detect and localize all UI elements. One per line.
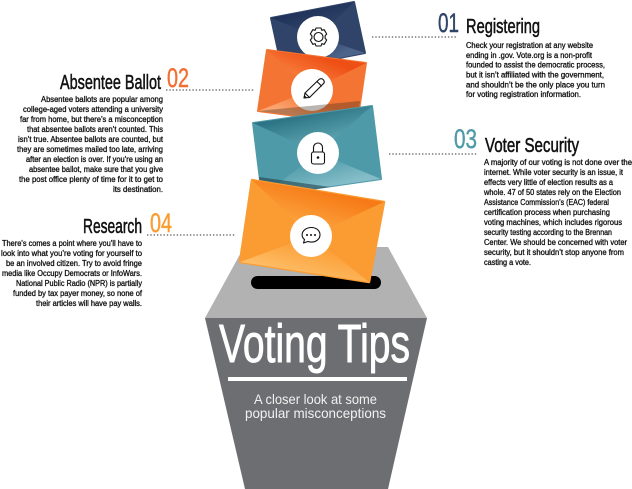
title underline	[228, 377, 407, 381]
dotted leader 03	[389, 153, 478, 155]
section 01: registering	[438, 8, 605, 99]
section 03: voter security	[454, 124, 632, 267]
body text: registering: ending in .gov. Vote.org is a non-profit	[466, 51, 593, 60]
dotted leader 01	[372, 36, 457, 38]
body text: research: their articles will have pay walls.	[36, 299, 142, 308]
body text: absentee ballot: after an election is over. If you’re using an	[26, 155, 163, 164]
body text: voter security: security testing according to the Brennan	[484, 228, 612, 237]
body text: absentee ballot: far from home, but there’s a misconception	[20, 115, 163, 124]
section 02: absentee ballot	[17, 63, 189, 194]
body text: registering: Check your registration at any website	[466, 41, 594, 50]
envelope 01: navy	[271, 2, 365, 69]
dotted leader 04	[147, 234, 236, 236]
heading: Research: Research	[83, 216, 142, 238]
body text: absentee ballot: its destination.	[113, 185, 163, 194]
number 01: 01	[438, 8, 459, 38]
body text: registering	[466, 41, 605, 99]
body text: absentee ballot: that absentee ballots aren’t counted. This	[27, 125, 163, 134]
body text: research	[1, 239, 143, 308]
heading: Registering: Registering	[466, 16, 540, 38]
envelope 04: amber	[240, 180, 384, 282]
shadow on orange envelope	[258, 101, 360, 124]
subtitle: A closer look at some	[254, 391, 377, 407]
heading: Voter Security: Voter Security	[485, 135, 579, 157]
body text: research: National Public Radio (NPR) is partially	[16, 279, 142, 288]
body text: research: be an involved citizen. Try to avoid fringe	[6, 259, 143, 268]
section 04: research	[1, 208, 172, 308]
body text: absentee ballot: college-aged voters attending a university	[23, 105, 163, 114]
body text: registering: for voting registration information.	[466, 90, 581, 99]
body text: voter security: internet. While voter security is an issue, it	[484, 168, 624, 177]
subtitle: popular misconceptions	[245, 405, 386, 421]
ballot slot	[251, 276, 381, 289]
heading: Absentee Ballot: Absentee Ballot	[60, 72, 161, 94]
ballot box	[205, 247, 427, 489]
dotted leader 02	[166, 89, 254, 91]
body text: registering: and shouldn’t be the only place you turn	[466, 80, 605, 90]
body text: registering: but it isn’t affiliated with the government,	[466, 70, 604, 80]
number 04: 04	[150, 208, 172, 238]
box lid	[205, 247, 427, 318]
body text: voter security: security, but it shouldn’t stop anyone from	[484, 248, 624, 257]
icon: pencil	[304, 79, 324, 98]
envelope 03: teal	[253, 106, 381, 196]
icon: speech bubble	[302, 228, 320, 243]
envelope 02: orange	[258, 50, 366, 124]
body text: research: media like Occupy Democrats or InfoWars.	[2, 269, 142, 278]
subtitle	[245, 391, 386, 421]
body text: absentee ballot: the post office plenty of time for it to get to	[19, 175, 164, 184]
body text: voter security	[483, 158, 632, 267]
body text: voter security: Assistance Commission’s (EAC) federal	[484, 198, 609, 207]
icon: padlock	[312, 143, 324, 164]
number 03: 03	[454, 124, 477, 154]
shadow on navy envelope	[290, 52, 345, 66]
box front	[205, 318, 427, 489]
body text: absentee ballot: absentee ballot, make sure that you give	[29, 165, 164, 174]
body text: voter security: casting a vote.	[484, 258, 531, 267]
shadow on teal envelope	[259, 177, 330, 196]
body text: research: funded by tax payer money, so none of	[13, 289, 143, 298]
body text: voter security: certification process when purchasing	[484, 208, 610, 217]
body text: absentee ballot: they are sometimes mailed too late, arriving	[17, 145, 163, 154]
title: Voting Tips: Voting Tips	[219, 314, 410, 374]
body text: absentee ballot: Absentee ballots are popular among	[41, 95, 163, 104]
body text: voter security: effects very little of election results as a	[484, 178, 614, 187]
body text: registering: founded to assist the democratic process,	[466, 60, 605, 70]
title block	[219, 314, 410, 421]
body text: absentee ballot: isn’t true. Absentee ballots are counted, but	[18, 135, 164, 144]
number 02: 02	[167, 63, 189, 93]
body text: absentee ballot	[17, 95, 164, 194]
body text: voter security: whole. 47 of 50 states rely on the Election	[483, 188, 621, 197]
body text: research: look into what you’re voting for yourself to	[1, 249, 143, 258]
icon: gear	[310, 28, 327, 46]
body text: voter security: voting machines, which includes rigorous	[484, 218, 622, 227]
body text: research: There’s comes a point where you’ll have to	[2, 239, 142, 248]
